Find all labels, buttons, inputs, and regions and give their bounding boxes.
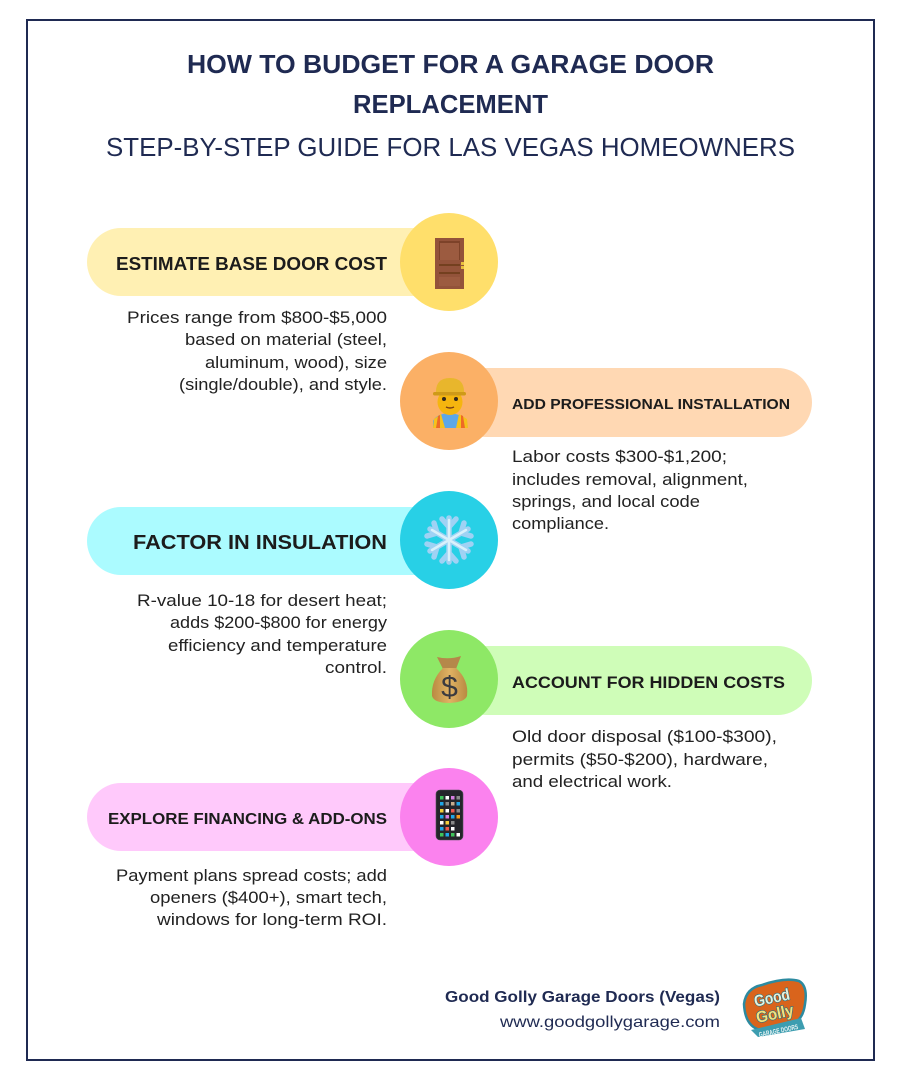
step 3 description: R-value 10-18 for desert heat; <box>137 591 387 610</box>
step 4 description: and electrical work. <box>512 772 672 791</box>
step 1 description: (single/double), and style. <box>179 375 387 394</box>
step 3 description <box>137 591 388 677</box>
step 3 description: control. <box>325 658 387 677</box>
title: REPLACEMENT <box>353 89 548 119</box>
step 1 heading: ESTIMATE BASE DOOR COST <box>116 254 387 274</box>
step 5: explore financing and add-ons <box>87 768 498 929</box>
step 4 description: Old door disposal ($100-$300), <box>512 727 777 746</box>
icon: money bag: $ <box>441 671 458 704</box>
step 4: account for hidden costs <box>400 630 812 791</box>
step 4 circle <box>400 630 498 728</box>
step 2 description: springs, and local code <box>512 492 700 511</box>
step 2 description: compliance. <box>512 514 609 533</box>
logo: Good Golly: Golly <box>755 1002 796 1027</box>
step 3: factor in insulation <box>87 491 498 677</box>
step 4 heading: ACCOUNT FOR HIDDEN COSTS <box>512 673 785 692</box>
icon: snowflake <box>427 518 471 562</box>
step 5 pill <box>87 783 447 851</box>
step 1 description <box>127 308 387 394</box>
step 3 heading: FACTOR IN INSULATION <box>133 531 387 554</box>
step 3 description: adds $200-$800 for energy <box>170 613 388 632</box>
icon: money bag <box>432 656 467 704</box>
icon: smartphone <box>436 790 463 840</box>
step 3 pill <box>87 507 447 575</box>
icon: construction worker <box>433 378 468 428</box>
step 1 description: based on material (steel, <box>185 330 387 349</box>
step 2 description: includes removal, alignment, <box>512 470 748 489</box>
step 5 description: Payment plans spread costs; add <box>116 866 387 885</box>
step 4 description: permits ($50-$200), hardware, <box>512 750 768 769</box>
logo: Good Golly: Good <box>753 987 791 1011</box>
footer company name and website: Good Golly Garage Doors (Vegas) <box>445 989 720 1006</box>
step 4 pill <box>452 646 812 715</box>
title: HOW TO BUDGET FOR A GARAGE DOOR <box>187 49 714 79</box>
step 5 description <box>116 866 387 929</box>
step 2: add professional installation <box>400 352 812 533</box>
title <box>187 49 714 119</box>
footer company name and website <box>445 989 720 1031</box>
step 2 pill <box>452 368 812 437</box>
subtitle: STEP-BY-STEP GUIDE FOR LAS VEGAS HOMEOWNERS <box>106 132 795 162</box>
step 5 heading: EXPLORE FINANCING & ADD-ONS <box>108 811 387 828</box>
step 5 description: windows for long-term ROI. <box>156 910 387 929</box>
step 2 description: Labor costs $300-$1,200; <box>512 447 727 466</box>
step 1 pill <box>87 228 447 296</box>
icon: door <box>435 238 464 289</box>
step 4 description <box>512 727 777 791</box>
step 1 circle <box>400 213 498 311</box>
step 1 description: aluminum, wood), size <box>205 353 387 372</box>
step 2 description <box>512 447 748 533</box>
logo: Good Golly <box>744 980 806 1039</box>
step 1: estimate base door cost <box>87 213 498 394</box>
step 5 circle <box>400 768 498 866</box>
logo: Good Golly: GARAGE DOORS <box>758 1024 799 1039</box>
footer company name and website: www.goodgollygarage.com <box>499 1014 720 1031</box>
step 3 description: efficiency and temperature <box>168 636 387 655</box>
step 3 circle <box>400 491 498 589</box>
step 2 heading: ADD PROFESSIONAL INSTALLATION <box>512 396 790 413</box>
step 1 description: Prices range from $800-$5,000 <box>127 308 387 327</box>
step 5 description: openers ($400+), smart tech, <box>150 888 387 907</box>
step 2 circle <box>400 352 498 450</box>
